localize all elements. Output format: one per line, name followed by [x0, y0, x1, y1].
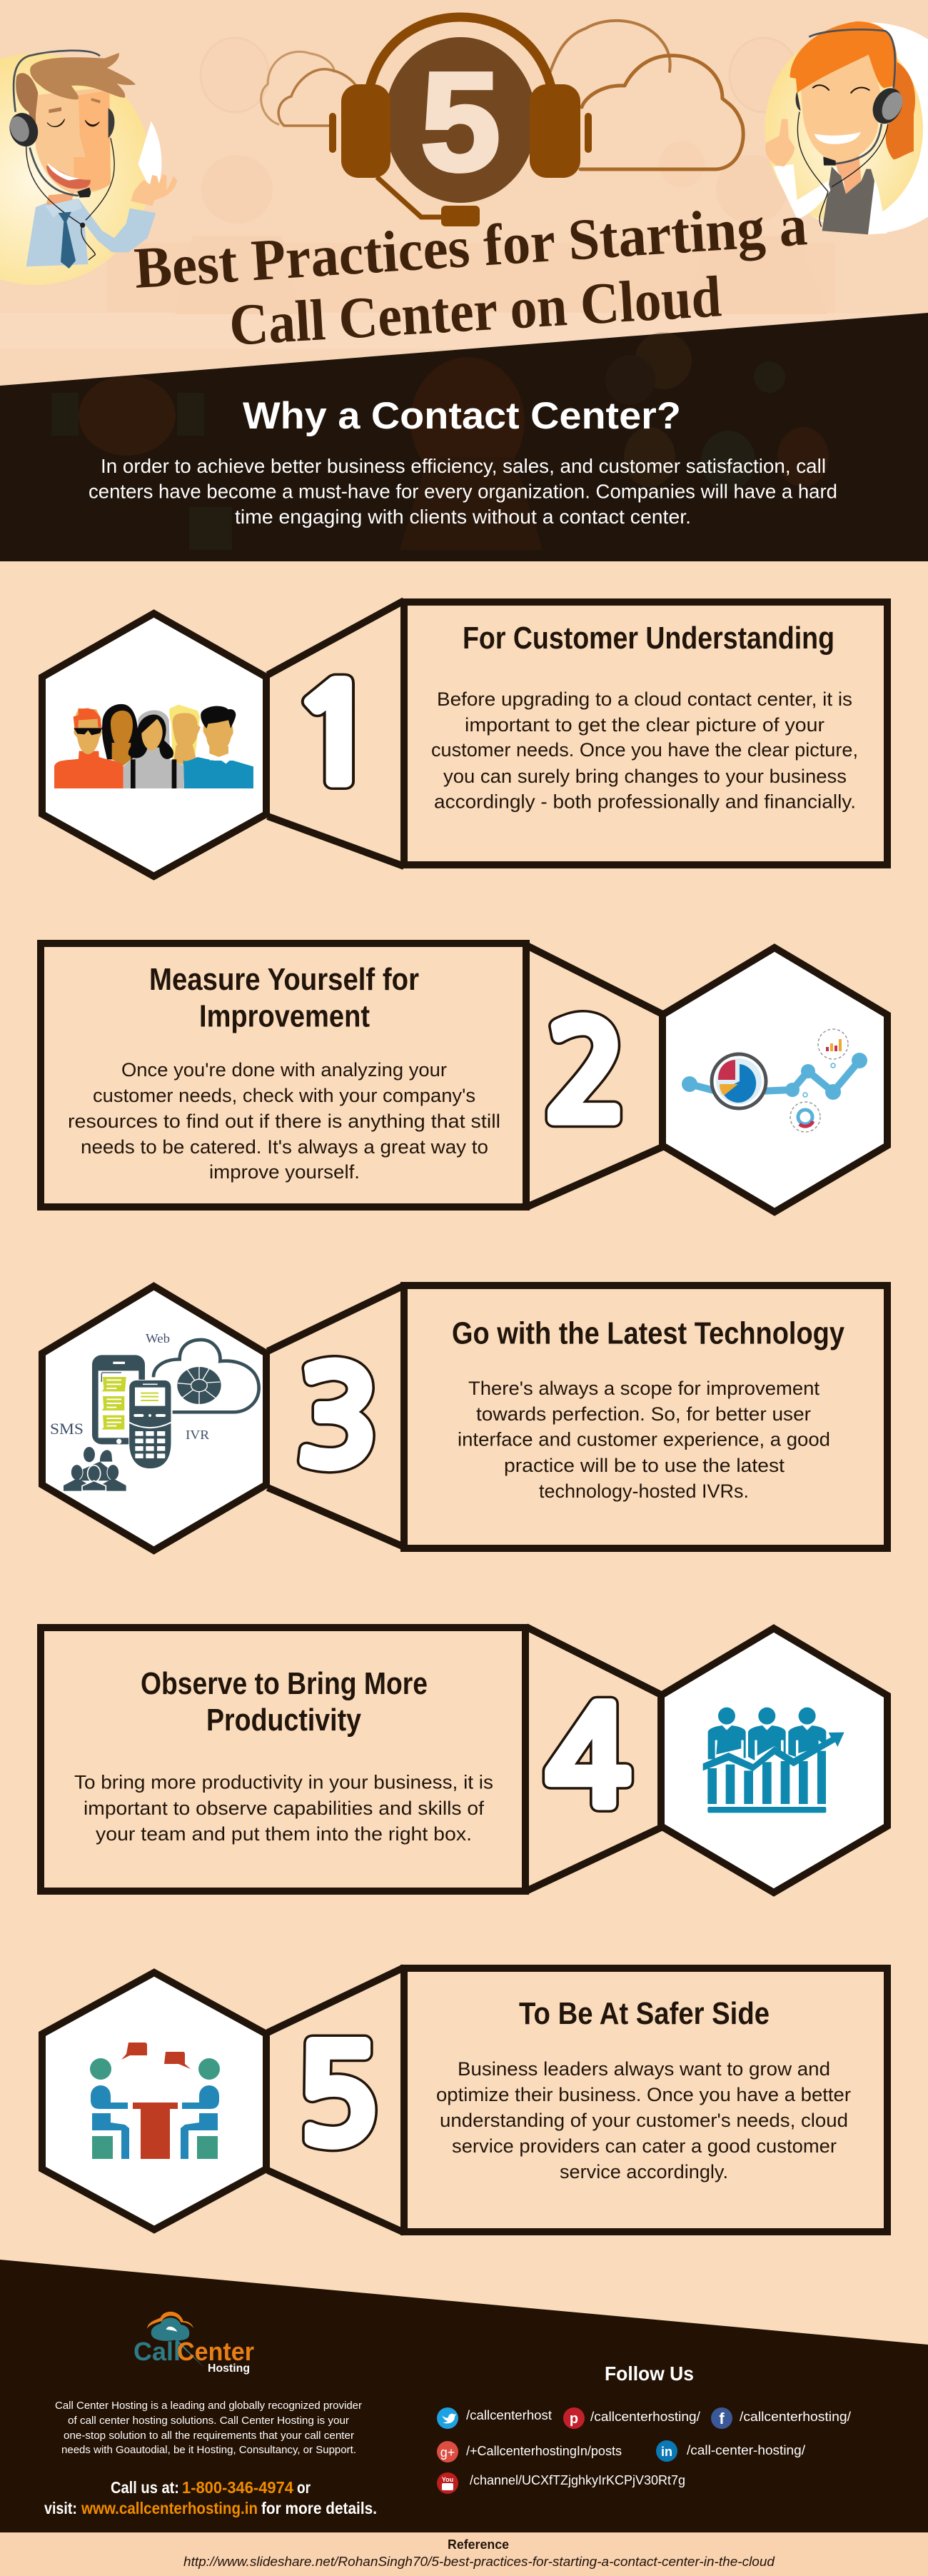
intro text: time engaging with clients without a contact center.	[235, 506, 691, 528]
body 1: accordingly - both professionally and financially.	[434, 791, 856, 813]
social: linkedin	[656, 2440, 805, 2462]
number 2: 2	[544, 1007, 628, 1141]
panel: item 1 customer understanding	[42, 601, 887, 876]
big number 5 with headset	[329, 17, 592, 226]
social: google plus: g+	[440, 2445, 455, 2460]
body 1: Before upgrading to a cloud contact center, it is	[437, 688, 852, 710]
body 1	[431, 688, 858, 813]
big number 5 with headset: 5	[420, 44, 500, 200]
panel: item 2 measure yourself	[41, 943, 887, 1212]
number 5: 5	[296, 2030, 380, 2165]
illustration: female call agent	[765, 21, 928, 234]
body 3: practice will be to use the latest	[504, 1455, 785, 1476]
number 3: 3	[296, 1352, 380, 1486]
body 3: towards perfection. So, for better user	[476, 1403, 811, 1425]
body 1: you can surely bring changes to your business	[443, 766, 847, 787]
heading 2: Measure Yourself for	[149, 962, 419, 997]
social: youtube: /channel/UCXfTZjghkyIrKCPjV30Rt7g	[470, 2473, 685, 2487]
body 4: important to observe capabilities and skills of	[84, 1798, 485, 1819]
company description	[55, 2400, 362, 2456]
heading 5: To Be At Safer Side	[519, 1996, 770, 2031]
body 4: To bring more productivity in your business, it is	[74, 1771, 493, 1793]
number 4: 4	[545, 1692, 631, 1826]
intro text: centers have become a must-have for every organization. Companies will have a hard	[89, 480, 837, 503]
hexagon 5	[42, 1973, 266, 2230]
connector 5	[268, 1968, 404, 2232]
body 4	[74, 1771, 493, 1845]
panel: item 3 latest technology	[42, 1286, 887, 1550]
icon: two people meeting at a table	[90, 2043, 220, 2159]
body 3: interface and customer experience, a good	[458, 1428, 830, 1450]
contact details	[44, 2478, 377, 2517]
body 3: technology-hosted IVRs.	[539, 1480, 749, 1502]
company description: Call Center Hosting is a leading and globally recognized provider	[55, 2400, 362, 2412]
heading 1: For Customer Understanding	[463, 621, 834, 656]
logo: Call Center Hosting: Call	[133, 2337, 181, 2366]
contact details: 1-800-346-4974	[182, 2478, 293, 2497]
title	[132, 192, 809, 358]
company description: of call center hosting solutions. Call Center Hosting is your	[68, 2415, 349, 2427]
body 2	[68, 1059, 500, 1183]
number 3: 3	[296, 1352, 380, 1486]
connector 2	[527, 946, 662, 1207]
connector 3	[268, 1286, 404, 1547]
social: facebook: f	[719, 2410, 725, 2427]
body 3	[458, 1378, 830, 1502]
social: facebook	[711, 2407, 851, 2429]
icon: analytics line chart	[682, 1029, 867, 1132]
body 5: optimize their business. Once you have a better	[436, 2084, 851, 2105]
contact details: visit:	[44, 2499, 77, 2517]
text box 3	[404, 1286, 887, 1548]
number 1: 1	[289, 669, 382, 803]
faint background illustrations	[51, 332, 829, 550]
panel: item 5 safer side	[42, 1968, 887, 2232]
social: pinterest	[563, 2407, 700, 2429]
logo: Call Center Hosting: Hosting	[208, 2362, 250, 2375]
text box 2	[41, 943, 526, 1207]
reference URL: http://www.slideshare.net/RohanSingh70/5-best-practices-for-starting-a-contact-center-in-the-cloud	[183, 2555, 775, 2569]
hexagon 1	[42, 613, 266, 876]
social: linkedin: in	[661, 2445, 672, 2459]
panel: why a contact center	[0, 313, 928, 561]
social: twitter: /callcenterhost	[466, 2408, 552, 2422]
social: youtube	[437, 2472, 685, 2494]
label: Web: Web	[146, 1331, 170, 1345]
logo: Call Center Hosting	[133, 2312, 254, 2375]
heading 2: Improvement	[199, 998, 370, 1034]
body 3: There's always a scope for improvement	[468, 1378, 819, 1399]
connector 1	[268, 601, 404, 866]
reference label: Reference	[448, 2537, 509, 2552]
social: youtube: You	[442, 2476, 453, 2483]
social: google plus: /+CallcenterhostingIn/posts	[466, 2444, 622, 2458]
number 2: 2	[544, 1007, 628, 1141]
contact details: www.callcenterhosting.in	[81, 2499, 258, 2517]
contact details: for more details.	[261, 2499, 377, 2517]
body 2: resources to find out if there is anything that still	[68, 1111, 500, 1132]
social: facebook: /callcenterhosting/	[740, 2410, 851, 2424]
label: SMS: SMS	[50, 1420, 84, 1438]
hexagon 3	[42, 1286, 266, 1550]
text box 4	[41, 1628, 525, 1891]
title: Call Center on Cloud	[228, 264, 723, 358]
number 1: 1	[289, 669, 382, 803]
body 1: customer needs. Once you have the clear picture,	[431, 739, 858, 761]
logo: Call Center Hosting: Center	[177, 2337, 254, 2366]
body 1: important to get the clear picture of your	[465, 714, 824, 736]
contact details: Call us at:	[111, 2478, 179, 2497]
header background with faint illustrations	[0, 0, 928, 400]
text box 1	[404, 602, 887, 865]
social: google plus	[437, 2441, 622, 2462]
connector 4	[526, 1627, 661, 1891]
body 5: Business leaders always want to grow and	[458, 2058, 830, 2080]
text box 5	[404, 1968, 887, 2232]
illustration: male call agent	[0, 51, 177, 285]
company description: one-stop solution to all the requirements that your call center	[64, 2430, 354, 2442]
heading 4: Observe to Bring More	[141, 1666, 428, 1701]
heading 3: Go with the Latest Technology	[452, 1315, 844, 1351]
heading 4	[141, 1666, 428, 1738]
body 2: customer needs, check with your company's	[93, 1085, 475, 1106]
panel: item 4 productivity	[41, 1627, 887, 1893]
title: Best Practices for Starting a	[132, 192, 809, 301]
icon: team and growth arrow	[703, 1708, 844, 1813]
body 4: your team and put them into the right box.	[96, 1823, 472, 1845]
social: linkedin: /call-center-hosting/	[687, 2443, 805, 2457]
label: IVR: IVR	[186, 1428, 209, 1442]
intro text	[89, 455, 837, 528]
social: pinterest: /callcenterhosting/	[590, 2410, 700, 2424]
social: twitter	[437, 2407, 552, 2429]
social: pinterest: p	[570, 2411, 578, 2427]
body 2: needs to be catered. It's always a great way to	[81, 1136, 488, 1158]
heading: Why a Contact Center?	[243, 395, 681, 437]
panel: reference strip	[0, 2532, 928, 2576]
intro text: In order to achieve better business efficiency, sales, and customer satisfaction, call	[101, 455, 826, 477]
body 2: Once you're done with analyzing your	[121, 1059, 447, 1081]
body 5	[436, 2058, 851, 2182]
body 5: understanding of your customer's needs, cloud	[440, 2110, 848, 2131]
contact details: or	[297, 2478, 311, 2497]
heading 2	[149, 962, 419, 1034]
number 5: 5	[296, 2030, 380, 2165]
heading 4: Productivity	[206, 1703, 361, 1738]
panel: footer	[0, 2260, 928, 2532]
body 5: service accordingly.	[560, 2161, 728, 2182]
icon: group of people	[54, 704, 253, 788]
body 5: service providers can cater a good customer	[452, 2135, 837, 2157]
hexagon 4	[661, 1628, 887, 1893]
hexagon 2	[662, 948, 887, 1212]
heading: follow us: Follow Us	[605, 2362, 694, 2385]
icon: web, SMS and IVR channels	[50, 1331, 259, 1491]
body 2: improve yourself.	[209, 1161, 360, 1183]
company description: needs with Goautodial, be it Hosting, Consultancy, or Support.	[61, 2444, 356, 2456]
number 4: 4	[545, 1692, 631, 1826]
clouds behind headset	[261, 21, 743, 169]
